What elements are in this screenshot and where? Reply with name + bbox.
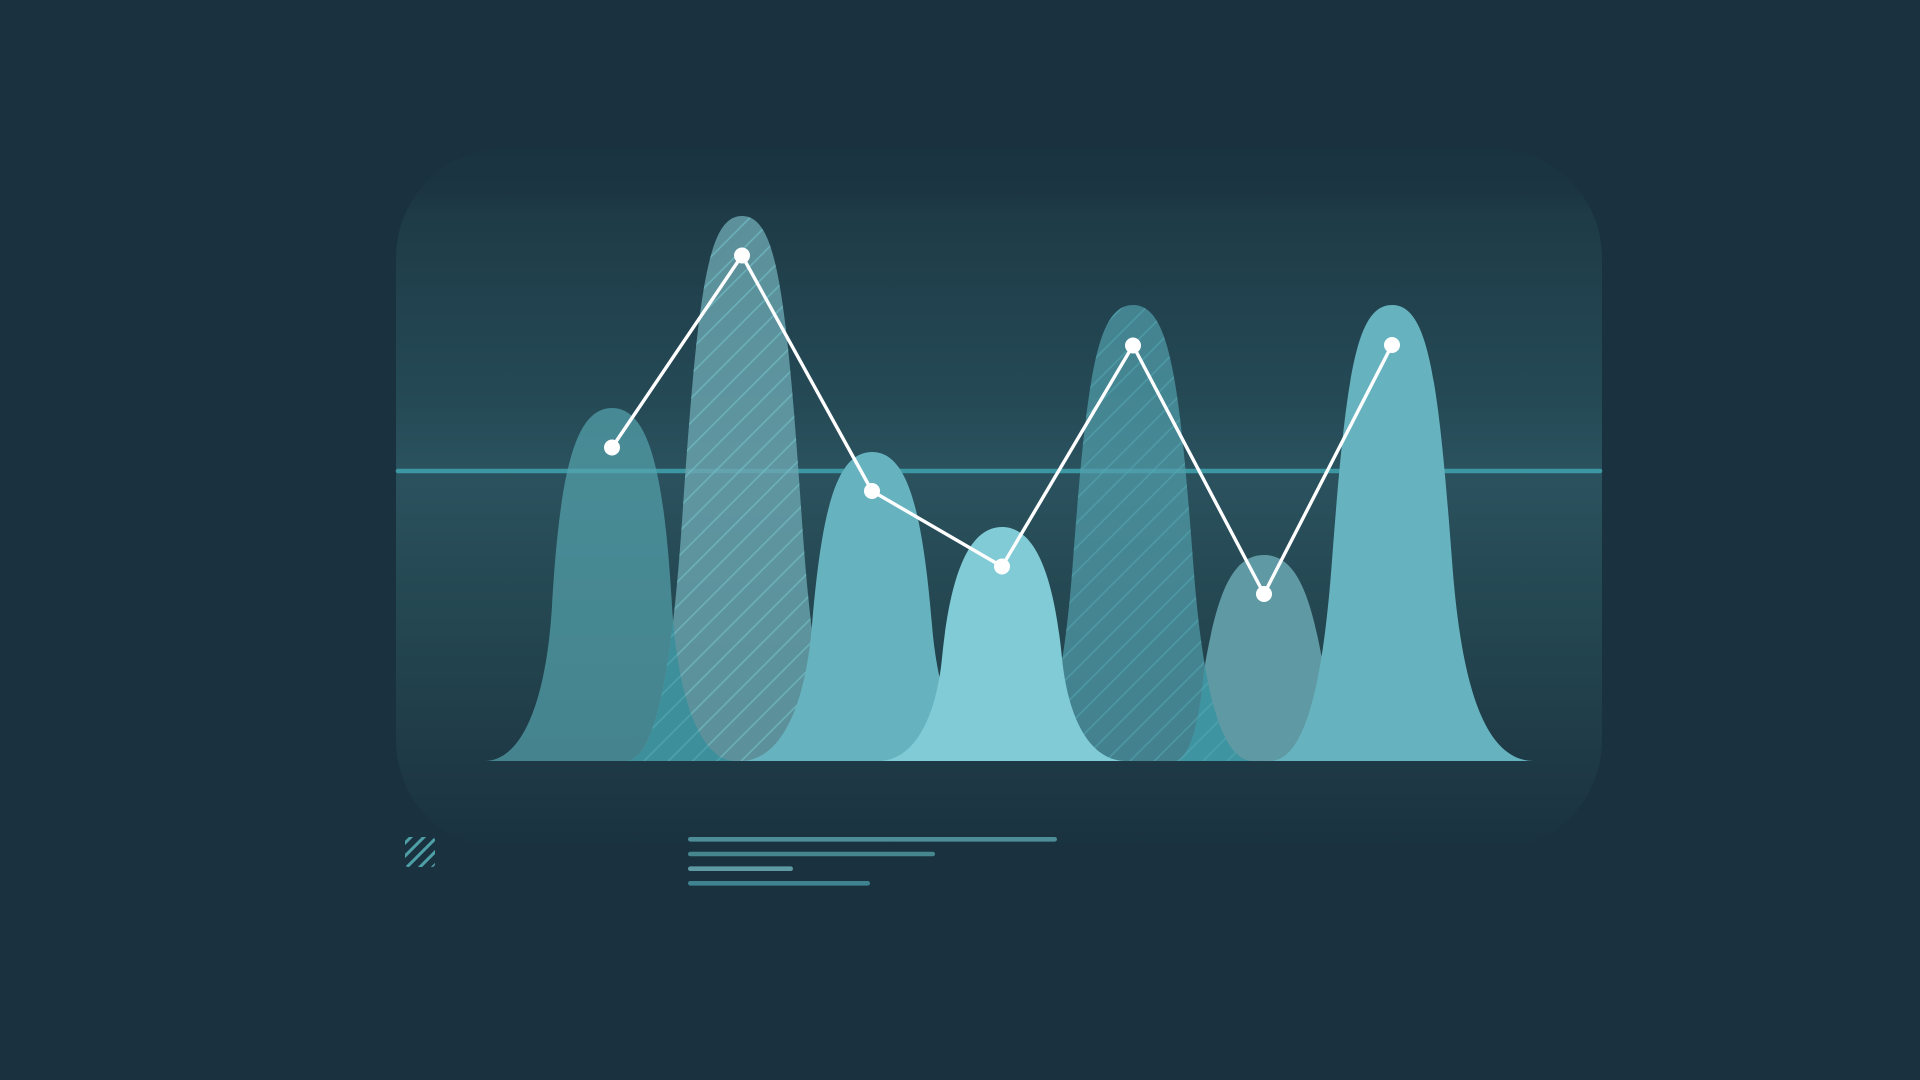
average reference line [398,469,1600,473]
infographic canvas [396,211,1602,886]
peak 1 [484,408,736,761]
chart panel [396,148,1602,850]
peak 4 [878,527,1126,761]
peak 5 hatched [1013,305,1253,761]
peak 3 [740,452,1004,761]
peak 2 hatched [626,216,858,761]
overlap of peaks 1 and 2 [628,622,733,761]
peak 6 [1174,555,1354,761]
data points [604,248,1400,602]
icon: hatched legend swatch [405,837,435,867]
trend line [612,256,1392,594]
legend lines placeholder [688,837,1057,886]
overlap of peaks 5 and 6 [1176,666,1250,761]
peak 7 [1270,305,1534,761]
